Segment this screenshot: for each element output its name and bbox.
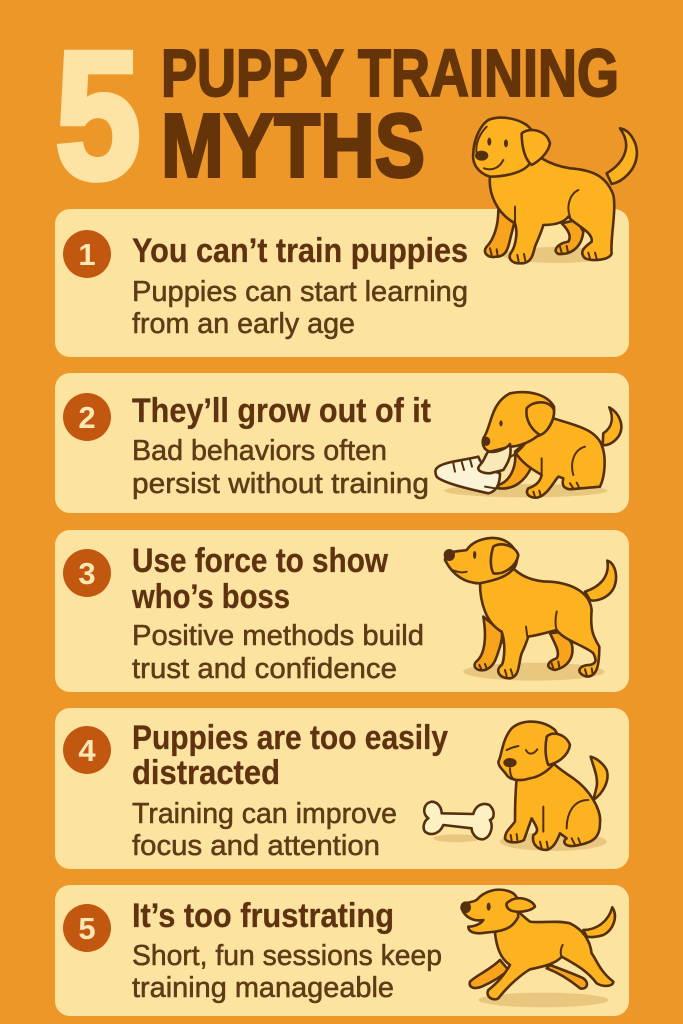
panel: myth 1 xyxy=(55,209,629,357)
myth heading: Puppies are too easily xyxy=(132,719,448,757)
icon: sitting puppy with closed eyes xyxy=(498,722,608,851)
panel: myth 4 xyxy=(55,708,629,869)
number badge 5 xyxy=(63,904,111,952)
icon: running puppy xyxy=(460,890,615,1007)
myth heading: It’s too frustrating xyxy=(132,897,394,935)
number badge 1 xyxy=(63,230,111,278)
myth heading: They’ll grow out of it xyxy=(132,392,431,430)
myth heading: Use force to show xyxy=(132,542,388,580)
myth explanation xyxy=(132,435,429,500)
number badge 1: 1 xyxy=(78,237,96,272)
icon: puppy chewing a shoe xyxy=(435,392,621,498)
card background xyxy=(55,885,629,1016)
myth explanation: focus and attention xyxy=(132,830,380,862)
myth heading xyxy=(132,719,448,792)
myth explanation: training manageable xyxy=(132,972,394,1004)
myth explanation: Training can improve xyxy=(132,798,397,830)
panel: myth 2 xyxy=(55,373,629,513)
icon: bone xyxy=(424,802,494,842)
myth explanation xyxy=(132,620,424,685)
icon: standing puppy in profile xyxy=(444,538,616,681)
panel: myth 3 xyxy=(55,530,629,692)
myth explanation: Short, fun sessions keep xyxy=(132,940,442,972)
myth explanation: Positive methods build xyxy=(132,620,424,652)
myth heading: distracted xyxy=(132,754,280,792)
number badge 3: 3 xyxy=(78,556,96,591)
myth explanation: persist without training xyxy=(132,468,429,500)
title xyxy=(161,36,619,196)
card background xyxy=(55,708,629,869)
myth explanation: Bad behaviors often xyxy=(132,435,387,467)
icon: standing puppy xyxy=(473,118,637,263)
myth heading: You can’t train puppies xyxy=(132,232,468,270)
number badge 3 xyxy=(63,549,111,597)
title: MYTHS xyxy=(161,96,425,196)
number badge 4: 4 xyxy=(78,733,96,768)
card background xyxy=(55,373,629,513)
number badge 4 xyxy=(63,726,111,774)
number badge 2: 2 xyxy=(78,400,96,435)
myth explanation xyxy=(132,798,397,862)
card background xyxy=(55,530,629,692)
panel: myth 5 xyxy=(55,885,629,1016)
card background xyxy=(55,209,629,357)
myth explanation: trust and confidence xyxy=(132,653,397,685)
big number 5: 5 xyxy=(55,13,141,217)
number badge 5: 5 xyxy=(78,911,96,946)
number badge 2 xyxy=(63,393,111,441)
myth heading xyxy=(131,542,388,616)
myth explanation xyxy=(132,940,442,1004)
myth heading: who’s boss xyxy=(131,578,290,616)
myth explanation xyxy=(132,276,468,340)
myth explanation: from an early age xyxy=(132,308,355,340)
myth explanation: Puppies can start learning xyxy=(132,276,468,308)
